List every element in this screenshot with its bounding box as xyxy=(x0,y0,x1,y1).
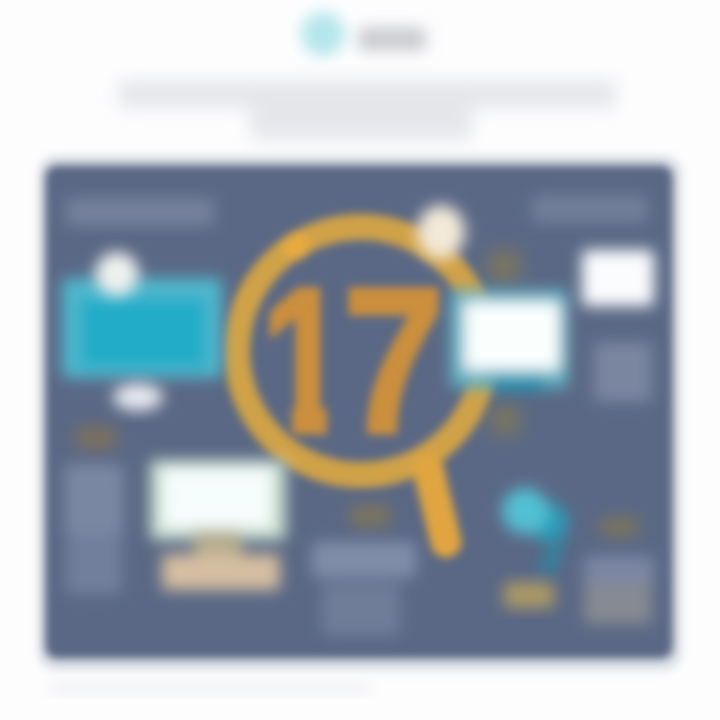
logo xyxy=(301,12,426,56)
panel: teal screen xyxy=(62,252,222,411)
heading: top left xyxy=(66,198,214,226)
title xyxy=(118,80,616,140)
text block: lower right xyxy=(584,517,654,624)
monitor stand xyxy=(113,383,163,411)
tag: orange xyxy=(504,582,554,608)
panel: small white card xyxy=(582,250,654,306)
panel: white card with teal border xyxy=(450,290,568,390)
faint marks beside the ring xyxy=(488,250,520,435)
magnifying glass xyxy=(237,227,485,542)
text block: lower center xyxy=(312,505,416,636)
big number 17: 7 xyxy=(343,245,444,477)
icon: teal drop xyxy=(502,488,568,572)
main panel xyxy=(38,155,682,671)
heading: top right xyxy=(532,195,648,223)
big number 17: 1 xyxy=(261,244,347,476)
panel: light monitor xyxy=(150,460,286,590)
icon: badge above screen xyxy=(95,252,139,296)
big number 17 xyxy=(264,281,444,440)
small badge on ring xyxy=(417,205,465,259)
text block: right column xyxy=(594,342,652,402)
text block: lower left xyxy=(64,426,124,594)
footer xyxy=(50,682,370,694)
